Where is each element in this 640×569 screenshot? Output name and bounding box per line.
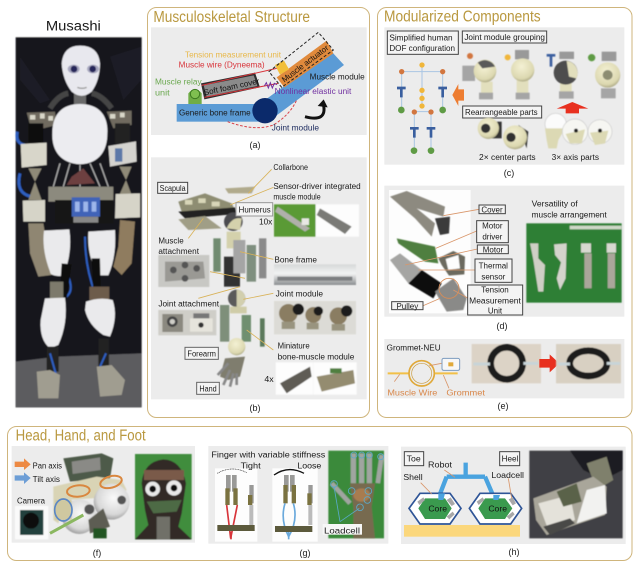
caption (d): (d)	[496, 321, 508, 331]
label: Pulley: Pulley	[396, 302, 418, 311]
caption (c): (c)	[504, 168, 514, 178]
diagram (h): foot: Robot	[428, 460, 453, 469]
diagram (f): head mechanism: Pan axis	[33, 462, 62, 471]
photo: joint modules	[274, 301, 356, 334]
label: Toe	[404, 452, 424, 466]
label: Motor driver: driver	[482, 232, 503, 241]
arrow: Pan axis	[15, 458, 31, 470]
DOF stick figure	[397, 62, 447, 154]
diagram (f): head mechanism: Camera	[17, 496, 46, 505]
diagram (a): muscle module schematic: Muscle relay	[155, 78, 202, 87]
label: Tension Measurement Unit: Measurement	[469, 296, 522, 305]
diagram (b): exploded arm with modules: Bone frame	[274, 256, 318, 265]
photo: bone frame extrusion	[274, 264, 356, 285]
callout: Humerus	[236, 203, 273, 216]
diagram (b): exploded arm with modules: bone-muscle module	[278, 352, 355, 361]
loose finger	[272, 468, 318, 542]
diagram (f): head mechanism	[12, 446, 195, 543]
photo: joint attachment	[158, 310, 216, 335]
diagram (f): head mechanism: Tilt axis	[33, 475, 60, 484]
diagram (e): Grommet-NEU: Muscle Wire	[387, 387, 438, 397]
diagram (h): foot: Loadcell	[491, 471, 524, 480]
photo: hand with loadcells	[328, 451, 384, 538]
foot schematic: Core	[428, 505, 448, 514]
diagram (h): foot	[401, 447, 626, 544]
panel: Head, Hand, and Foot	[8, 426, 632, 560]
diagram (a): muscle module schematic: Generic bone frame	[179, 108, 251, 117]
diagram (e): Grommet-NEU: Grommet-NEU	[387, 344, 441, 353]
label: Loadcell (hand): Loadcell	[324, 526, 360, 535]
diagram (g): variable stiffness finger: Tight	[241, 462, 262, 471]
diagram (b): exploded arm with modules: muscle module	[273, 193, 321, 202]
joint modules row	[462, 50, 620, 99]
label: Motor	[477, 245, 508, 254]
photos: sensor-driver muscle modules	[274, 204, 359, 237]
label: Heel	[500, 452, 520, 466]
photo: Musashi humanoid robot	[16, 37, 142, 407]
photo: grommet before	[472, 344, 541, 383]
photo: robot head on green	[135, 454, 192, 539]
label: Tension Measurement Unit: Unit	[488, 307, 503, 316]
label: Thermal sensor: Thermal	[479, 261, 508, 270]
diagram (a): muscle module schematic	[151, 27, 367, 135]
diagram (d): muscle module exploded view: Versatility of	[532, 199, 578, 208]
diagram (b): exploded arm with modules: Joint attachment	[158, 300, 220, 309]
diagram (b): exploded arm with modules: 4x	[264, 375, 274, 384]
caption (e): (e)	[498, 401, 509, 411]
callout: Joint module grouping: Joint module grouping	[464, 33, 545, 42]
callout: DOF configuration: DOF configuration	[389, 44, 455, 53]
label: Motor: Motor	[483, 245, 504, 254]
panel: Musashi robot	[16, 19, 142, 407]
panel: Musculoskeletal Structure	[148, 8, 370, 418]
arrow: red up	[557, 102, 588, 113]
caption (b): (b)	[250, 403, 261, 413]
photo: camera	[15, 506, 48, 539]
label: Tension Measurement Unit	[468, 285, 523, 316]
diagram (e): Grommet-NEU: Grommet	[446, 387, 486, 397]
diagram (b): exploded arm with modules: Collarbone	[273, 163, 308, 172]
photo: muscle attachment plate	[158, 255, 209, 287]
callout: Hand	[197, 382, 219, 394]
diagram (a): muscle module schematic: Muscle actuator	[280, 43, 331, 84]
heading: Musculoskeletal Structure: Musculoskeletal Structure	[153, 9, 310, 26]
foot schematic	[409, 463, 522, 524]
diagram (g): variable stiffness finger: Finger with variable stiffness	[211, 451, 325, 460]
diagram (a): muscle module schematic: Nonlinear elastic unit	[275, 87, 352, 96]
label: Loadcell (hand)	[323, 524, 362, 535]
diagram (c): DOF configuration and joint grouping: 3× axis parts	[552, 153, 599, 162]
diagram (b): exploded arm with modules	[151, 157, 367, 399]
photo: muscle modules on green	[526, 223, 622, 303]
callout: Forearm	[185, 347, 218, 359]
callout: DOF configuration	[387, 31, 458, 54]
label: Tension Measurement Unit: Tension	[481, 286, 509, 295]
callout: Humerus: Humerus	[239, 205, 271, 214]
diagram (b): exploded arm with modules: Sensor-driver integrated	[273, 182, 361, 191]
diagram (b): exploded arm with modules: Joint module	[276, 290, 324, 299]
diagram (a): muscle module schematic: unit	[155, 88, 171, 97]
diagram (d): muscle module exploded view: muscle arrangement	[532, 210, 607, 219]
parts: center and axis	[478, 113, 612, 149]
diagram (a): muscle module schematic: Joint module	[272, 124, 320, 133]
callout: Hand: Hand	[199, 384, 217, 393]
diagram (d): muscle module exploded view	[384, 186, 624, 317]
diagram (g): variable stiffness finger	[208, 446, 388, 544]
diagram (a): muscle module schematic: Tension measurement unit	[185, 50, 282, 59]
diagram (a): muscle module schematic: Muscle module	[310, 72, 365, 81]
heading: Head, Hand, and Foot: Head, Hand, and Foot	[16, 428, 146, 445]
diagram (c): DOF configuration and joint grouping: 2× center parts	[479, 153, 536, 162]
callout: Rearrangeable parts: Rearrangeable parts	[465, 108, 538, 117]
caption (f): (f)	[93, 548, 101, 558]
photos: miniature bone-muscle modules	[276, 362, 357, 395]
label: Toe: Toe	[407, 455, 421, 464]
diagram (h): foot: Shell	[403, 473, 423, 482]
label: Thermal sensor	[475, 259, 512, 282]
arrow: orange to DOF configuration	[452, 84, 464, 106]
heading: Musashi: Musashi	[46, 19, 101, 34]
callout: Joint module grouping	[462, 31, 547, 43]
label: Motor driver: Motor	[482, 221, 503, 230]
caption (a): (a)	[250, 140, 261, 150]
label: Pulley	[392, 302, 423, 311]
arrow: Tilt axis	[15, 472, 31, 484]
diagram (b): exploded arm with modules: Miniature	[278, 342, 310, 351]
callout: Rearrangeable parts	[463, 106, 542, 118]
callout: Scapula: Scapula	[160, 184, 186, 193]
label: Cover: Cover	[481, 205, 503, 214]
heading: Modularized Components: Modularized Components	[384, 9, 541, 26]
caption (h): (h)	[508, 547, 520, 557]
arrow: red right	[539, 354, 559, 372]
label: Heel: Heel	[502, 455, 519, 464]
diagram (a): muscle module schematic: Soft foam cover	[203, 77, 261, 97]
callout: Forearm: Forearm	[187, 349, 216, 358]
diagram (g): variable stiffness finger: Loose	[297, 462, 322, 471]
caption (g): (g)	[300, 548, 311, 558]
diagram (b): exploded arm with modules: Muscle	[158, 236, 184, 245]
diagram (b): exploded arm with modules: attachment	[158, 247, 200, 256]
tight finger	[215, 468, 257, 542]
photo: foot	[529, 451, 623, 538]
label: Thermal sensor: sensor	[481, 272, 506, 281]
diagram (b): exploded arm with modules: 10x	[259, 218, 272, 227]
callout: DOF configuration: Simplified human	[389, 33, 453, 42]
photo: grommet after	[556, 344, 621, 383]
diagram (e): Grommet-NEU	[384, 339, 624, 398]
label: Motor driver	[477, 221, 508, 243]
head CAD model	[53, 453, 130, 538]
diagram (a): muscle module schematic: Muscle wire (Dyneema)	[179, 60, 265, 69]
foot schematic: Core	[488, 505, 508, 514]
diagram (c): DOF configuration and joint grouping	[384, 27, 624, 165]
panel: Modularized Components	[378, 8, 632, 418]
